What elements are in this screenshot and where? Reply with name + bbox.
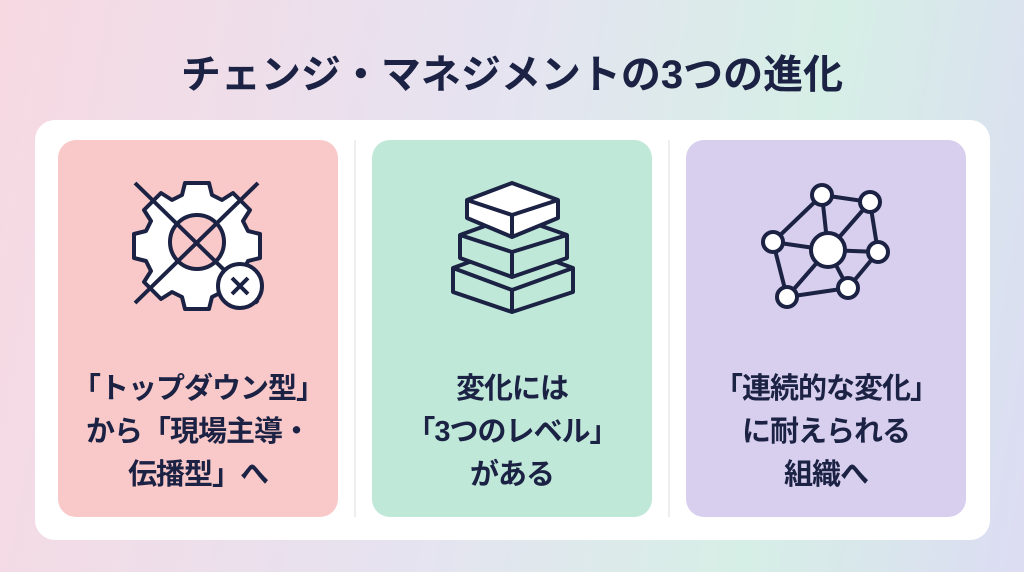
text: 変化には [456, 373, 568, 405]
text: 「3つのレベル」 [406, 416, 618, 448]
white card [35, 120, 990, 540]
text: 「トップダウン型」 [72, 373, 324, 405]
text: がある [470, 459, 554, 491]
icon: network [761, 183, 890, 309]
text: 伝播型」へ [128, 459, 268, 491]
text [714, 373, 938, 491]
text [72, 372, 324, 491]
text: 「連続的な変化」 [714, 373, 938, 405]
text: 組織へ [784, 459, 868, 491]
panel: continuous change [686, 140, 966, 517]
icon: gear with x [132, 181, 264, 311]
title: チェンジ・マネジメントの3つの進化 [181, 53, 843, 97]
text: に耐えられる [742, 416, 910, 448]
panel: three levels [372, 140, 652, 517]
icon: stacked layers [451, 181, 575, 314]
text [406, 373, 618, 491]
text: から「現場主導・ [86, 416, 310, 448]
panel: top-down to field-led [58, 140, 338, 517]
